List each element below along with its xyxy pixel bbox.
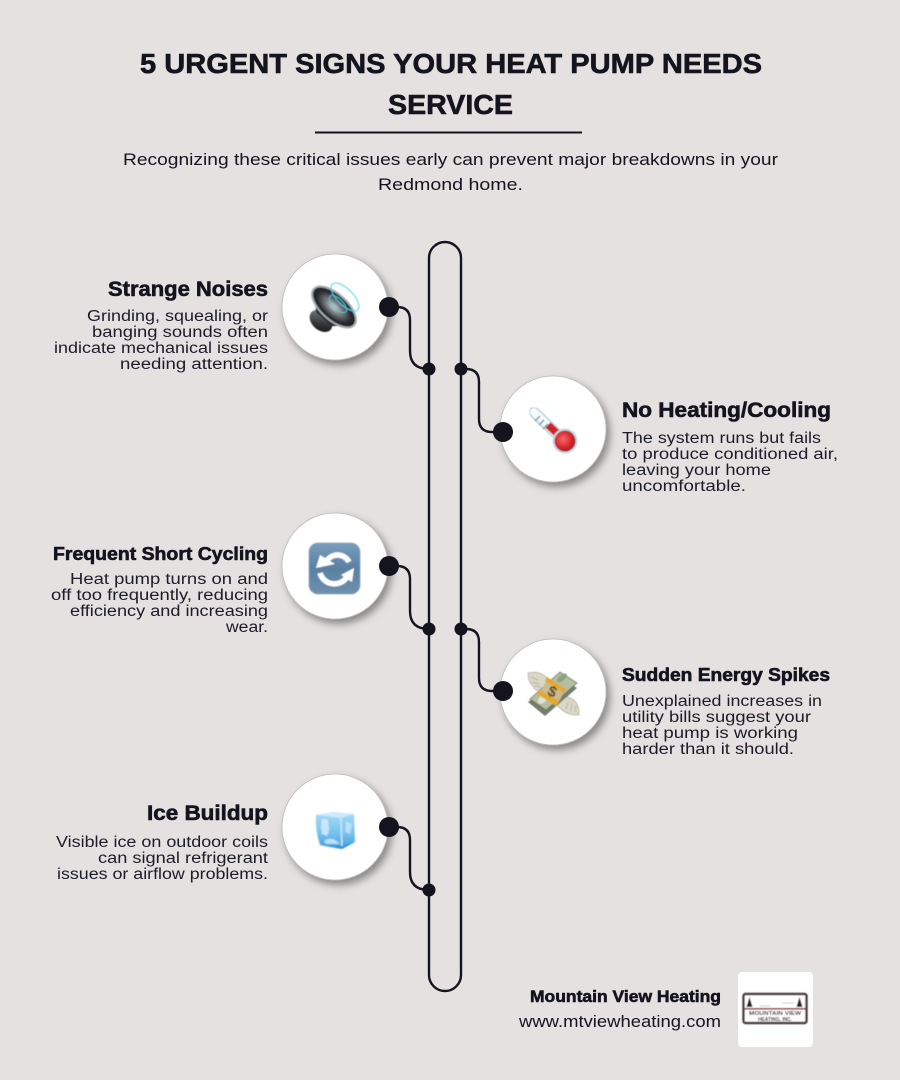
- title: [140, 48, 762, 120]
- timeline track: [429, 242, 461, 991]
- panel: ice buildup: [56, 774, 399, 883]
- body text: off too frequently, reducing: [51, 587, 268, 604]
- body text: utility bills suggest your: [622, 709, 811, 726]
- body text: Grinding, squealing, or: [87, 308, 268, 325]
- body text: Heat pump turns on and: [70, 571, 268, 588]
- body text: [56, 834, 269, 883]
- panel: frequent short cycling: [51, 513, 399, 636]
- body text: needing attention.: [120, 356, 268, 373]
- title: 5 URGENT SIGNS YOUR HEAT PUMP NEEDS: [140, 48, 762, 79]
- icon: thermometer: [534, 412, 578, 454]
- footer: company name and website: Mountain View Heating: [530, 987, 721, 1006]
- heading: Ice Buildup: [147, 802, 268, 825]
- footer: company name and website: www.mtviewheating.com: [518, 1012, 721, 1031]
- logo: HEATING, INC.: [758, 1017, 792, 1023]
- subtitle: Redmond home.: [378, 175, 523, 194]
- body text: uncomfortable.: [622, 478, 746, 495]
- panel: sudden energy spikes: [493, 639, 830, 758]
- body text: leaving your home: [622, 462, 771, 479]
- connector dot: [493, 422, 513, 442]
- footer: company name and website: [518, 987, 721, 1031]
- body text: banging sounds often: [92, 324, 268, 341]
- logo: [738, 972, 813, 1047]
- body text: harder than it should.: [622, 741, 794, 758]
- connector dot: [379, 556, 399, 576]
- connector: no heating cooling: [461, 369, 503, 432]
- body text: efficiency and increasing: [70, 603, 268, 620]
- subtitle: [123, 150, 778, 194]
- body text: Unexplained increases in: [622, 693, 822, 710]
- body text: [622, 693, 822, 758]
- heading: Strange Noises: [108, 278, 268, 301]
- connector dot: [379, 817, 399, 837]
- connector: strange noises: [389, 307, 429, 369]
- title underline: [315, 132, 582, 134]
- subtitle: Recognizing these critical issues early can prevent major breakdowns in your: [123, 150, 778, 169]
- timeline junction dots: [422, 362, 468, 896]
- body text: [51, 571, 268, 636]
- body text: [54, 308, 268, 373]
- heading: Sudden Energy Spikes: [622, 665, 830, 685]
- body text: issues or airflow problems.: [57, 866, 268, 883]
- icon circle: flying money: [500, 639, 606, 745]
- body text: heat pump is working: [622, 725, 798, 742]
- logo: MOUNTAIN VIEW: [749, 1011, 802, 1017]
- body text: can signal refrigerant: [98, 850, 269, 867]
- panel: no heating cooling: [493, 376, 838, 495]
- connector: ice buildup: [389, 827, 429, 890]
- icon: refresh arrows: [309, 543, 360, 594]
- body text: [622, 430, 838, 495]
- heading: No Heating/Cooling: [622, 399, 831, 422]
- body text: The system runs but fails: [622, 430, 821, 447]
- heading: Frequent Short Cycling: [53, 544, 268, 564]
- icon: money with wings: $: [545, 683, 560, 702]
- connector: short cycling: [389, 566, 429, 629]
- connector dot: [493, 681, 513, 701]
- panel: strange noises: [54, 254, 399, 373]
- icon circle: ice cube: [282, 774, 388, 880]
- body text: indicate mechanical issues: [54, 340, 268, 357]
- body text: wear.: [225, 619, 268, 636]
- icon circle: refresh: [282, 513, 388, 619]
- title: SERVICE: [388, 89, 513, 120]
- icon circle: speaker: [282, 254, 388, 360]
- body text: to produce conditioned air,: [622, 446, 838, 463]
- connector: energy spikes: [461, 629, 503, 691]
- icon: ice cube: [316, 812, 355, 849]
- icon: speaker: [305, 279, 363, 336]
- icon circle: thermometer: [500, 376, 606, 482]
- connector dot: [379, 297, 399, 317]
- body text: Visible ice on outdoor coils: [56, 834, 268, 851]
